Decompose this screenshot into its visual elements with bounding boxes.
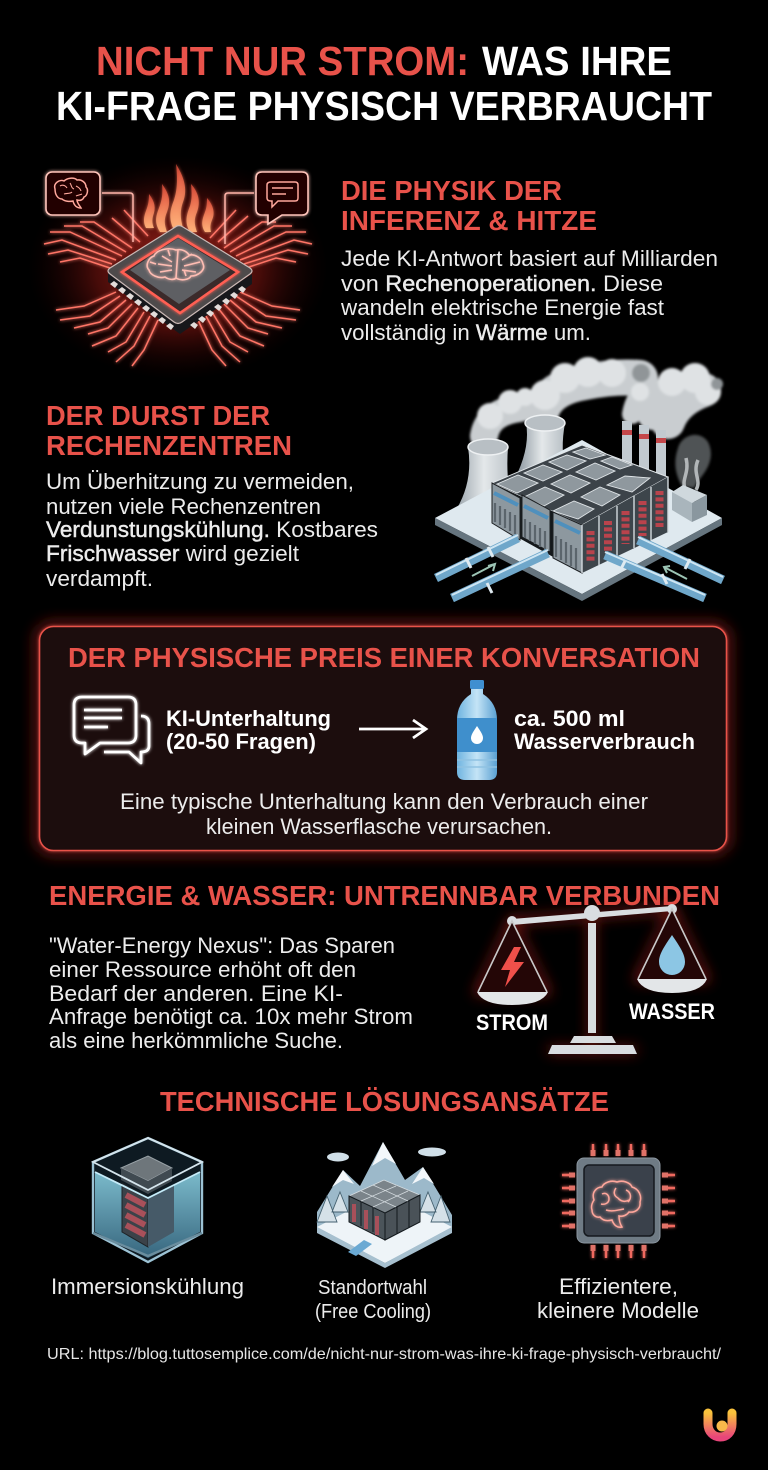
- panel box: [40, 626, 726, 850]
- body text: von Rechenoperationen. Diese: [341, 271, 663, 296]
- body text: Verdunstungskühlung. Kostbares: [46, 517, 378, 542]
- dark smoke: [675, 435, 711, 488]
- title: KI-FRAGE PHYSISCH VERBRAUCHT: [56, 83, 712, 129]
- title: WAS IHRE: [482, 38, 672, 84]
- title: [56, 38, 712, 129]
- icon: water bottle: [457, 680, 497, 780]
- label: 500 ml: [514, 706, 695, 754]
- heading: RECHENZENTREN: [46, 430, 292, 461]
- body text: nutzen viele Rechenzentren: [46, 494, 321, 519]
- icon box: speech bubble: [256, 172, 308, 224]
- labels: solutions: kleinere Modelle: [537, 1298, 699, 1323]
- clouds: [327, 1148, 446, 1162]
- body text: Anfrage benötigt ca. 10x mehr Strom: [49, 1004, 413, 1029]
- panel caption: Eine typische Unterhaltung kann den Verbrauch einer: [120, 789, 648, 814]
- body text: verdampft.: [46, 566, 153, 591]
- server block top: [492, 445, 668, 525]
- beam and stand: [507, 904, 677, 1054]
- pipe couplings: [466, 547, 690, 593]
- label: 500 ml: ca. 500 ml: [514, 706, 625, 731]
- label: Wasser: WASSER: [629, 999, 715, 1024]
- icon: balance scale: [476, 904, 715, 1054]
- body text: Jede KI-Antwort basiert auf Milliarden: [341, 246, 718, 271]
- pin bases: [569, 1150, 668, 1251]
- body text: vollständig in Wärme um.: [341, 320, 591, 345]
- section: der Durst der Rechenzentren: [46, 400, 378, 591]
- panel glow: [38, 625, 728, 852]
- icon: chat bubbles: [74, 697, 149, 763]
- label: KI-Unterhaltung: KI-Unterhaltung: [166, 706, 331, 731]
- icon: logo: [708, 1413, 732, 1437]
- red glow: [478, 909, 706, 1050]
- label: KI-Unterhaltung: [166, 706, 331, 754]
- body text: "Water-Energy Nexus": Das Sparen: [49, 933, 395, 958]
- labels: solutions: [51, 1274, 699, 1323]
- body text: als eine herkömmliche Suche.: [49, 1028, 343, 1053]
- labels: solutions: Effizientere,: [559, 1274, 678, 1299]
- labels: solutions: (Free Cooling): [315, 1301, 431, 1323]
- arrow: [359, 720, 426, 738]
- flames: [144, 164, 214, 232]
- circuit traces: [44, 210, 312, 366]
- section: die Physik der Inferenz und Hitze: [340, 175, 718, 345]
- pipes: [436, 538, 723, 598]
- panel: der physische Preis einer Konversation: [38, 625, 728, 852]
- section: Energie und Wasser: [49, 880, 720, 1053]
- icon: glowing AI chip with heat: [28, 156, 328, 380]
- body text: wandeln elektrische Energie fast: [340, 295, 665, 320]
- servers: [349, 1180, 420, 1213]
- small utility box: [672, 485, 707, 503]
- icon: cold location with mountains: [317, 1142, 452, 1268]
- server left faces: [492, 483, 582, 573]
- panel heading: DER PHYSISCHE PREIS EINER KONVERSATION: [68, 642, 700, 673]
- flow arrows: [472, 564, 687, 579]
- heading: DIE PHYSIK DER: [341, 175, 562, 206]
- icon box: brain: [46, 172, 100, 215]
- platform: [435, 440, 722, 594]
- body text: [340, 246, 718, 345]
- body text: Um Überhitzung zu vermeiden,: [46, 469, 354, 494]
- panel caption: [120, 789, 648, 839]
- server right faces with red lights: [582, 477, 668, 573]
- heading: [46, 400, 292, 461]
- heading: [341, 175, 597, 236]
- labels: solutions: Standortwahl: [318, 1277, 427, 1299]
- body text: Bedarf der anderen. Eine KI-: [49, 981, 343, 1006]
- heading: DER DURST DER: [46, 400, 270, 431]
- connector lines: [102, 193, 254, 244]
- steam clouds: [477, 357, 723, 436]
- illustration: data center with cooling towers: [435, 357, 723, 601]
- cooling towers: [452, 447, 516, 528]
- label: KI-Unterhaltung: (20-50 Fragen): [166, 729, 316, 754]
- labels: solutions: Immersionskühlung: [51, 1274, 244, 1299]
- body text: [49, 933, 413, 1053]
- heading: technische Lösungsansätze: TECHNISCHE LÖSUNGSANSÄTZE: [160, 1086, 609, 1117]
- left pan: [477, 921, 548, 1005]
- right pan: [637, 909, 707, 993]
- smokestacks: [622, 421, 666, 490]
- label: 500 ml: Wasserverbrauch: [514, 729, 695, 754]
- body text: einer Ressource erhöht oft den: [49, 957, 356, 982]
- icon: efficient AI chip: [562, 1144, 675, 1258]
- body text: Frischwasser wird gezielt: [46, 541, 300, 566]
- panel caption: kleinen Wasserflasche verursachen.: [206, 814, 552, 839]
- label: Strom: STROM: [476, 1010, 548, 1035]
- icon: immersion cooling cube: [93, 1138, 202, 1262]
- heading: ENERGIE & WASSER: UNTRENNBAR VERBUNDEN: [49, 880, 720, 911]
- heading: INFERENZ & HITZE: [341, 205, 597, 236]
- source URL: URL: https://blog.tuttosemplice.com/de/nicht-nur-strom-was-ihre-ki-frage-physisch-verbraucht/: [47, 1346, 722, 1363]
- chip body: [108, 226, 252, 334]
- chip brain: [147, 249, 204, 280]
- trees: [317, 1192, 450, 1222]
- title: NICHT NUR STROM:: [96, 38, 469, 84]
- brain: [592, 1181, 641, 1227]
- body text: [46, 469, 378, 591]
